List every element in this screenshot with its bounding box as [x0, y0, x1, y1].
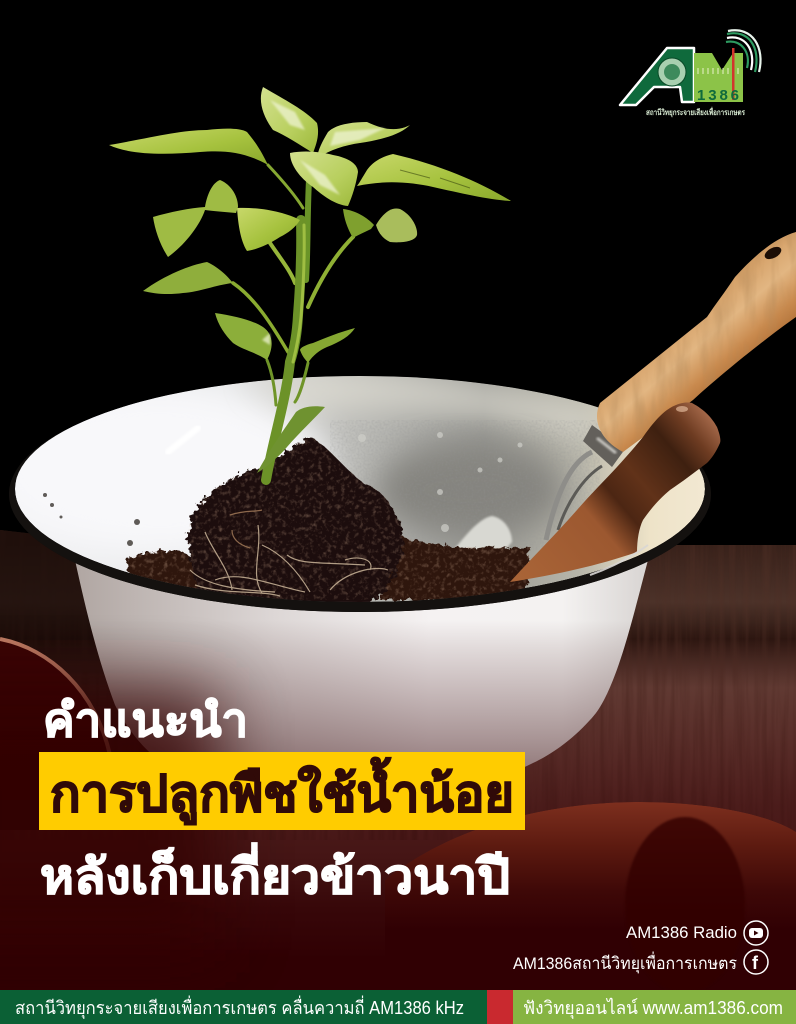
logo waves — [726, 30, 761, 72]
icon: facebook — [744, 950, 768, 974]
table left shadow — [0, 530, 200, 830]
soil base — [128, 438, 530, 605]
trowel ferrule — [583, 425, 625, 467]
footer bar — [0, 990, 796, 1024]
social: youtube: AM1386 Radio — [626, 923, 737, 942]
social: facebook: AM1386สถานีวิทยุเพื่อการเกษตร — [513, 951, 737, 974]
heading highlight — [39, 752, 525, 830]
saucer hollow — [626, 816, 744, 902]
bowl body — [75, 560, 648, 805]
leaf highlights — [262, 100, 385, 345]
bowl interior — [0, 376, 705, 602]
dark red gradient overlay — [0, 620, 796, 1024]
logo number: 1386 — [697, 87, 739, 104]
footer station text: สถานีวิทยุกระจายเสียงเพื่อการเกษตร คลื่นความถี่ AM1386 kHz — [15, 995, 464, 1019]
icon: youtube — [744, 921, 768, 945]
logo red needle — [732, 48, 734, 100]
leaves — [109, 87, 511, 473]
logo seal — [658, 58, 686, 86]
main stem — [266, 220, 301, 480]
heading line 3: หลังเก็บเกี่ยวข้าวนาปี — [40, 842, 510, 904]
trowel handle — [590, 225, 796, 455]
wooden table — [0, 530, 796, 924]
icon: facebook: f — [752, 953, 759, 973]
logo A — [620, 48, 694, 105]
trowel metal loop — [546, 452, 602, 540]
heading highlight: การปลูกพืชใช้น้ำน้อย — [50, 757, 514, 825]
bowl front rim — [15, 480, 705, 612]
plant — [109, 87, 511, 480]
footer website text: ฟังวิทยุออนไลน์ www.am1386.com — [523, 997, 783, 1019]
logo ticks — [698, 68, 738, 74]
bowl back rim — [9, 376, 711, 612]
heading line 1: คำแนะนำ — [43, 694, 248, 746]
soil mound with roots — [128, 438, 530, 605]
terracotta saucer — [390, 802, 796, 918]
trowel — [510, 225, 796, 582]
roots — [190, 510, 388, 596]
wooden scoop — [510, 403, 720, 582]
bowl — [12, 376, 708, 767]
logo — [620, 30, 761, 118]
social: youtube — [626, 921, 768, 945]
droplets — [358, 432, 522, 532]
ice shard — [454, 515, 513, 550]
terracotta pot left — [0, 639, 112, 800]
logo caption: สถานีวิทยุกระจายเสียงเพื่อการเกษตร — [646, 106, 746, 118]
stems — [233, 165, 353, 480]
background photo — [0, 530, 796, 924]
logo M — [694, 53, 743, 102]
